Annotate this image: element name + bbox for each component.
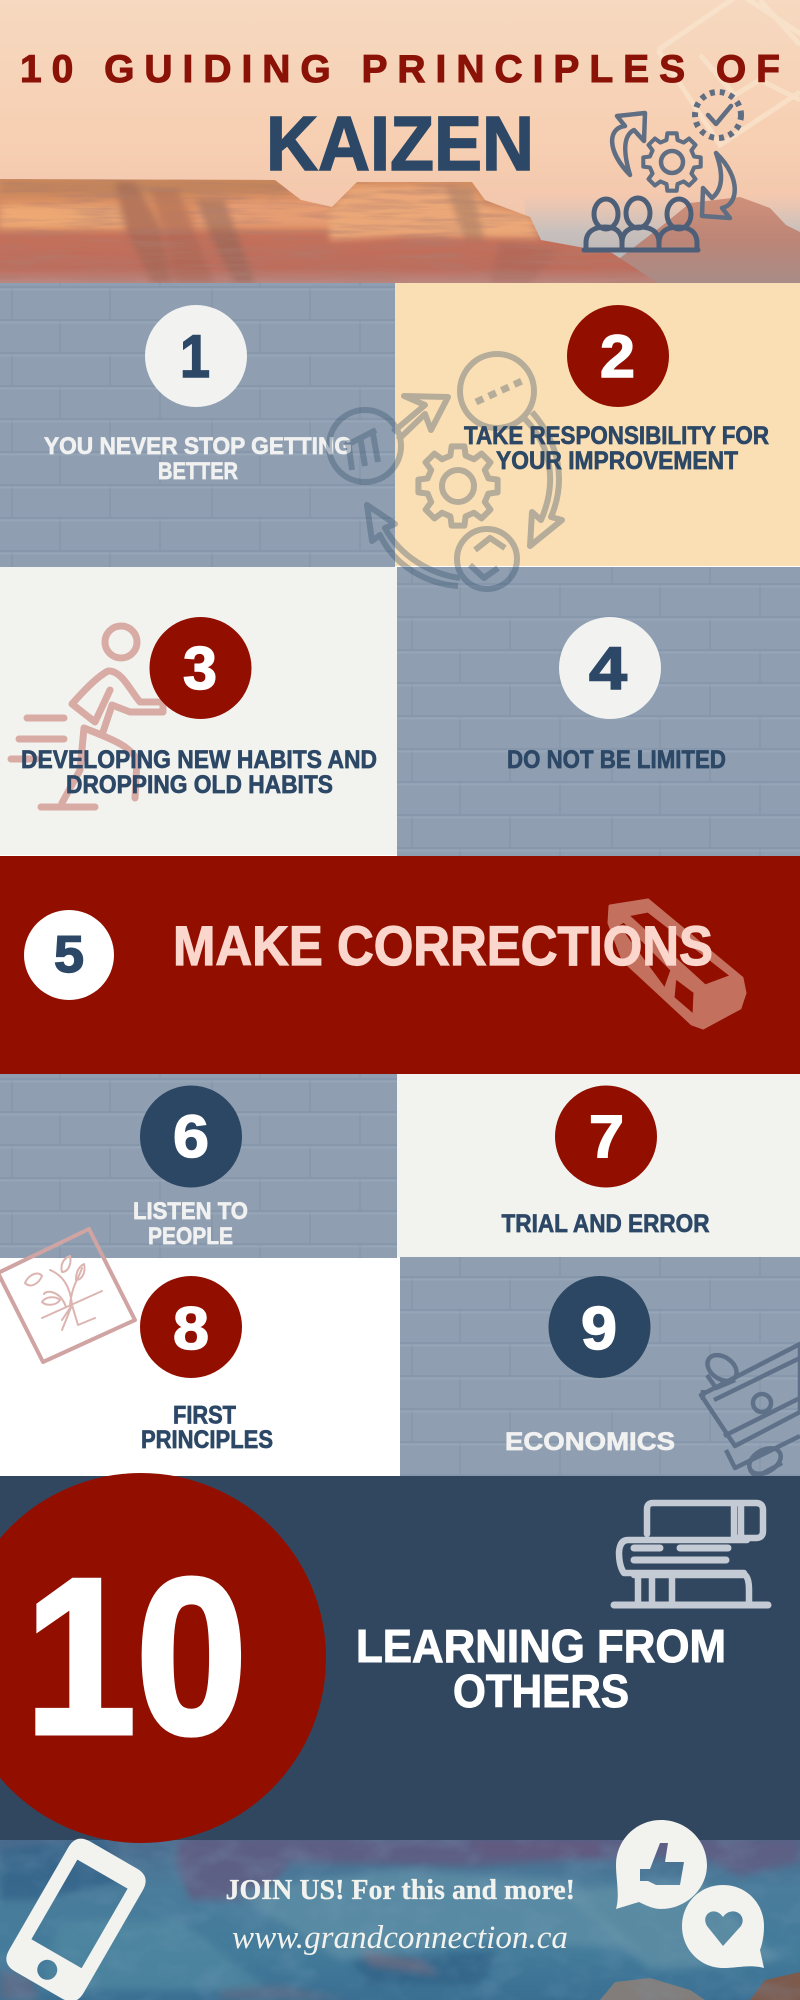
number badge 7: [555, 1086, 657, 1188]
number badge 3: [150, 617, 252, 719]
panel: principle 1: [0, 283, 395, 567]
number badge 1: 1: [180, 323, 210, 390]
panel: principle 9: [400, 1257, 800, 1479]
panel: principle 4: [397, 567, 800, 856]
label 2: [464, 422, 769, 475]
number badge 7: 7: [589, 1103, 624, 1170]
label 2: TAKE RESPONSIBILITY FOR: [464, 422, 769, 450]
panel: principle 2: [395, 283, 800, 566]
icon: like bubble: [616, 1820, 707, 1909]
footer text: website: www.grandconnection.ca: [232, 1920, 568, 1956]
title line: 10 GUIDING PRINCIPLES OF: [20, 48, 780, 91]
decoration: faint envelope: [658, 0, 800, 145]
number badge 8: [140, 1276, 242, 1378]
title: KAIZEN: KAIZEN: [266, 101, 534, 187]
image: canyon cliffs: [0, 178, 660, 284]
label 7: TRIAL AND ERROR: [502, 1210, 710, 1238]
label 9: ECONOMICS: [505, 1428, 675, 1456]
panel: principle 7: [397, 1074, 800, 1257]
number badge 10: [0, 1473, 326, 1843]
number badge 10: 10: [25, 1533, 247, 1781]
icon: running person: [11, 626, 163, 807]
label 8: [141, 1402, 273, 1454]
label 1: BETTER: [158, 458, 238, 485]
icon: process cycle: [329, 354, 562, 589]
number badge 5: 5: [54, 926, 84, 984]
panel: header: [0, 0, 800, 284]
label 5: MAKE CORRECTIONS: [173, 914, 713, 977]
label 2: YOUR IMPROVEMENT: [496, 447, 738, 475]
label 10: OTHERS: [453, 1665, 629, 1717]
label 3: [21, 746, 377, 799]
panel: footer: [0, 1820, 800, 2000]
number badge 1: [145, 305, 247, 407]
panel: principle 6: [0, 1074, 397, 1258]
number badge 2: 2: [600, 323, 635, 390]
label 1: YOU NEVER STOP GETTING: [44, 433, 352, 460]
label 3: DROPPING OLD HABITS: [66, 771, 333, 799]
number badge 4: [559, 617, 661, 719]
icon: heart bubble: [682, 1885, 764, 1968]
label 6: LISTEN TO: [133, 1198, 248, 1225]
number badge 3: 3: [183, 635, 217, 702]
icon: money and coins: [701, 1344, 800, 1479]
icon: eraser: [609, 900, 745, 1028]
panel: principle 3: [0, 567, 397, 855]
label 1: [44, 433, 352, 485]
number badge 8: 8: [173, 1295, 209, 1362]
label 4: DO NOT BE LIMITED: [507, 746, 726, 774]
image: canyon landscape: [0, 1838, 800, 2000]
number badge 6: [140, 1086, 242, 1188]
number badge 6: 6: [173, 1103, 209, 1170]
icon: team improvement: [584, 92, 741, 250]
label 8: PRINCIPLES: [141, 1426, 273, 1454]
panel: principle 10: [0, 1476, 800, 1840]
number badge 2: [567, 305, 669, 407]
label 6: [133, 1198, 248, 1250]
label 8: FIRST: [173, 1402, 236, 1430]
number badge 9: [548, 1276, 650, 1378]
icon: phone: [1, 1834, 151, 2000]
number badge 9: 9: [581, 1295, 617, 1362]
number badge 5: [24, 910, 114, 1000]
label 10: [356, 1620, 726, 1717]
label 3: DEVELOPING NEW HABITS AND: [21, 746, 377, 774]
icon: stack of books: [614, 1503, 768, 1605]
icon: plant in tilted frame: [0, 1229, 135, 1362]
footer text: join us: JOIN US! For this and more!: [226, 1874, 575, 1906]
panel: principle 8: [0, 1258, 400, 1476]
number badge 4: 4: [589, 635, 628, 702]
image: distant mesa: [525, 195, 800, 284]
panel: principle 5: [0, 856, 800, 1074]
label 6: PEOPLE: [148, 1223, 233, 1250]
label 10: LEARNING FROM: [356, 1620, 726, 1672]
